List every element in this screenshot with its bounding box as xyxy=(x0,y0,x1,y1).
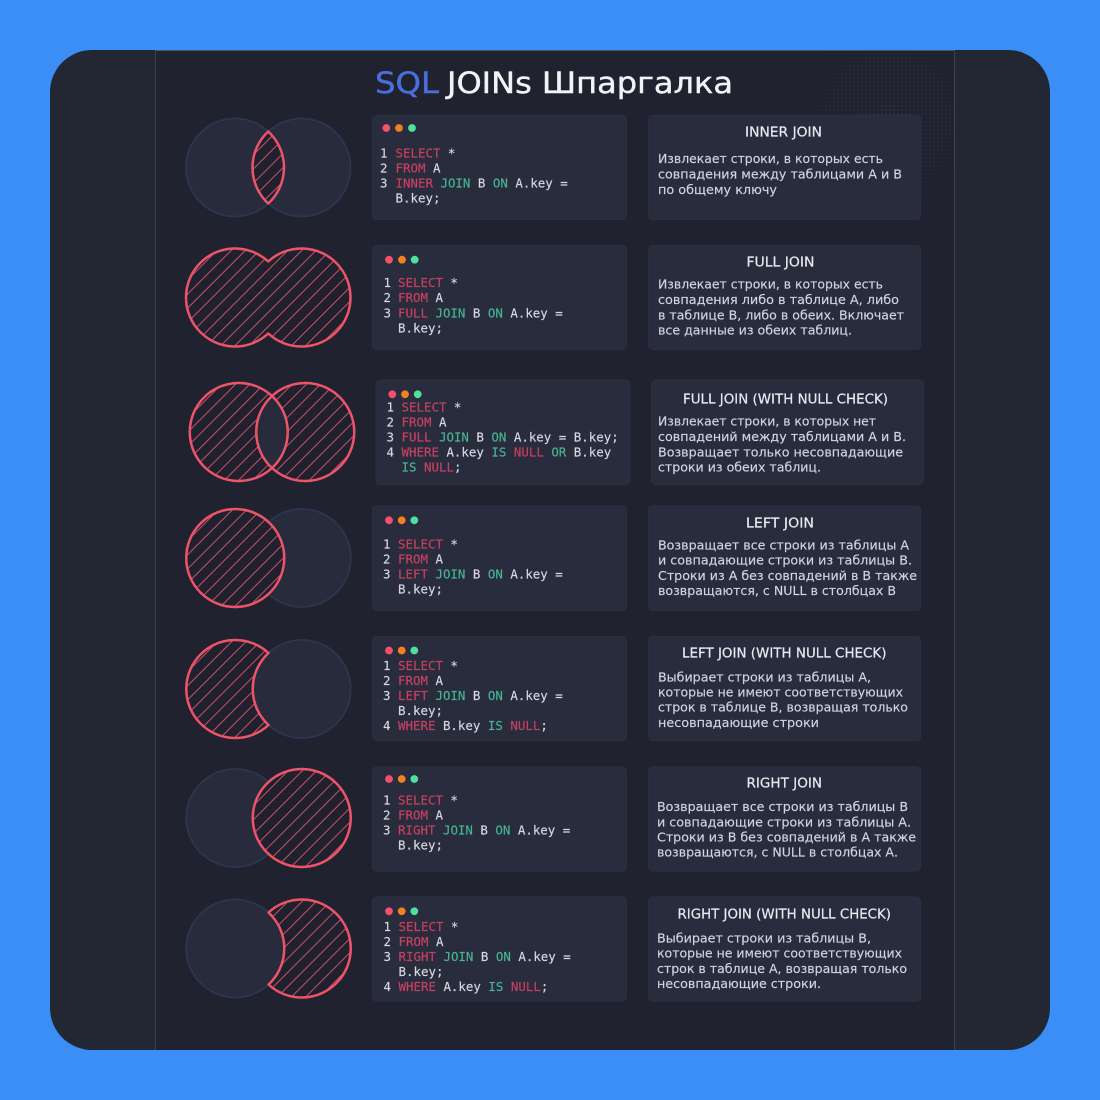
description: left join with null check: Выбирает строки из таблицы А, xyxy=(658,670,871,684)
code panel: full join with null check: 2 xyxy=(386,414,394,430)
code panel: left join xyxy=(372,506,626,610)
description: right join with null check: несовпадающие строки. xyxy=(657,977,821,991)
code panel: full join with null check xyxy=(376,380,630,484)
description: right join: Возвращает все строки из таблицы В xyxy=(657,800,908,814)
description: left join with null check: LEFT JOIN (WITH NULL CHECK) xyxy=(682,646,886,661)
description: full join: Извлекает строки, в которых есть xyxy=(658,278,883,292)
description: full join with null check: строки из обеих таблиц. xyxy=(658,461,821,475)
code panel: left join with null check: B.key; xyxy=(398,703,443,718)
description: left join with null check: строк в таблице В, возвращая только xyxy=(658,701,908,715)
description: full join with null check: Возвращает только несовпадающие xyxy=(658,445,903,459)
description: right join: и совпадающие строки из таблицы А. xyxy=(657,816,911,830)
description: right join: RIGHT JOIN xyxy=(746,777,822,792)
description: left join with null check: которые не имеют соответствующих xyxy=(658,686,903,700)
code panel: full join with null check: WHERE A.key IS NULL OR B.key xyxy=(402,444,611,460)
code panel: full join: FULL JOIN B ON A.key = xyxy=(398,306,563,320)
code panel: full join with null check: 4 xyxy=(386,444,394,460)
description: inner join: совпадения между таблицами А и В xyxy=(658,168,902,182)
code panel: full join with null check: 1 xyxy=(386,400,394,414)
description: full join: FULL JOIN xyxy=(746,256,814,271)
venn: full join with null check xyxy=(190,383,354,481)
code panel: left join with null check xyxy=(372,636,626,740)
description: full join xyxy=(648,246,920,350)
code panel: full join with null check: FULL JOIN B ON A.key = B.key; xyxy=(402,430,619,444)
code panel: right join with null check: 2 xyxy=(384,934,391,949)
code panel: right join: RIGHT JOIN B ON A.key = xyxy=(398,822,570,838)
code panel: right join: B.key; xyxy=(398,838,443,852)
code panel: inner join xyxy=(372,116,626,220)
description: full join: совпадения либо в таблице А, либо xyxy=(658,293,899,307)
description: inner join: по общему ключу xyxy=(658,183,777,197)
venn: left join xyxy=(186,509,351,607)
code panel: left join: 3 xyxy=(383,566,390,582)
code panel: inner join: 1 xyxy=(380,146,388,160)
code panel: full join: 3 xyxy=(384,306,391,320)
title: JOINs Шпаргалка xyxy=(445,66,733,100)
code panel: full join with null check: SELECT * xyxy=(402,400,461,414)
code panel: right join: 3 xyxy=(383,822,390,838)
description: right join xyxy=(648,767,920,871)
code panel: left join with null check: 1 xyxy=(383,658,390,673)
code panel: right join with null check: 1 xyxy=(384,919,391,934)
description: left join: возвращаются, с NULL в столбцах В xyxy=(658,584,896,598)
description: left join: Возвращает все строки из таблицы А xyxy=(658,538,910,552)
description: left join with null check xyxy=(648,636,920,740)
description: inner join xyxy=(648,116,920,220)
code panel: left join with null check: 4 xyxy=(383,718,390,733)
code panel: left join with null check: SELECT * xyxy=(398,658,458,673)
code panel: left join with null check: 2 xyxy=(383,673,390,688)
code panel: right join with null check: SELECT * xyxy=(398,919,458,934)
code panel: inner join: 3 xyxy=(380,176,388,190)
description: full join with null check: совпадений между таблицами А и В. xyxy=(658,430,906,444)
description: right join: возвращаются, с NULL в столбцах А. xyxy=(657,846,898,860)
description: full join with null check xyxy=(652,380,924,484)
code panel: full join: 1 xyxy=(384,275,391,290)
description: right join with null check: RIGHT JOIN (WITH NULL CHECK) xyxy=(678,907,891,922)
code panel: right join: FROM A xyxy=(398,808,443,822)
title: SQL xyxy=(375,66,439,100)
code panel: inner join: INNER JOIN B ON A.key = xyxy=(396,176,568,190)
venn: full join xyxy=(186,248,350,346)
description: right join with null check xyxy=(648,897,920,1001)
code panel: right join: 1 xyxy=(383,792,390,808)
code panel: left join: 2 xyxy=(383,552,390,566)
description: left join xyxy=(648,506,920,610)
code panel: right join xyxy=(372,767,626,871)
code panel: inner join: SELECT * xyxy=(396,146,455,160)
code panel: left join: 1 xyxy=(383,536,390,552)
code panel: left join: SELECT * xyxy=(398,536,458,552)
code panel: left join with null check: WHERE B.key IS NULL; xyxy=(398,718,548,733)
code panel: full join xyxy=(372,246,626,350)
description: inner join: INNER JOIN xyxy=(745,126,822,141)
description: full join with null check: FULL JOIN (WITH NULL CHECK) xyxy=(683,392,888,408)
venn: right join xyxy=(186,769,351,867)
code panel: full join with null check: 3 xyxy=(386,430,394,444)
code panel: right join: 2 xyxy=(383,808,390,822)
code panel: left join with null check: LEFT JOIN B ON A.key = xyxy=(398,688,563,703)
description: right join: Строки из В без совпадений в А также xyxy=(657,830,916,844)
code panel: left join with null check: FROM A xyxy=(398,673,443,688)
code panel: inner join: 2 xyxy=(380,160,388,176)
description: left join: Строки из А без совпадений в В также xyxy=(658,569,917,583)
description: full join with null check: Извлекает строки, в которых нет xyxy=(658,415,876,429)
description: left join with null check: несовпадающие строки xyxy=(658,716,819,730)
code panel: full join: 2 xyxy=(384,290,391,305)
description: full join: в таблице В, либо в обеих. Включает xyxy=(658,308,904,322)
code panel: inner join: B.key; xyxy=(396,190,440,206)
description: right join with null check: Выбирает строки из таблицы В, xyxy=(657,931,871,945)
description: right join with null check: которые не имеют соответствующих xyxy=(657,946,902,960)
code panel: full join with null check: IS NULL; xyxy=(402,460,461,474)
description: inner join: Извлекает строки, в которых есть xyxy=(658,152,883,166)
description: right join with null check: строк в таблице А, возвращая только xyxy=(657,962,907,976)
venn: right join with null check xyxy=(186,900,351,998)
code panel: right join with null check: 4 xyxy=(384,979,391,994)
code panel: full join: SELECT * xyxy=(398,275,458,290)
code panel: full join: B.key; xyxy=(398,320,443,336)
code panel: inner join: FROM A xyxy=(396,160,441,176)
code panel: right join: SELECT * xyxy=(398,792,458,808)
central panel xyxy=(155,50,955,1050)
code panel: left join: FROM A xyxy=(398,552,443,566)
description: full join: все данные из обеих таблиц. xyxy=(658,324,852,338)
code panel: right join with null check: RIGHT JOIN B ON A.key = xyxy=(398,949,571,964)
description: left join: LEFT JOIN xyxy=(746,516,814,532)
description: left join: и совпадающие строки из таблицы В. xyxy=(658,554,912,568)
code panel: left join with null check: 3 xyxy=(383,688,390,703)
venn: inner join xyxy=(186,118,350,216)
code panel: right join with null check: FROM A xyxy=(398,934,444,949)
code panel: full join with null check: FROM A xyxy=(402,414,447,430)
code panel: right join with null check: 3 xyxy=(384,949,391,964)
code panel: left join: LEFT JOIN B ON A.key = xyxy=(398,566,563,582)
code panel: right join with null check xyxy=(372,897,626,1001)
code panel: full join: FROM A xyxy=(398,290,443,305)
code panel: right join with null check: B.key; xyxy=(398,964,443,979)
venn: left join with null check xyxy=(186,640,351,738)
code panel: left join: B.key; xyxy=(398,582,443,596)
code panel: right join with null check: WHERE A.key IS NULL; xyxy=(398,979,548,994)
